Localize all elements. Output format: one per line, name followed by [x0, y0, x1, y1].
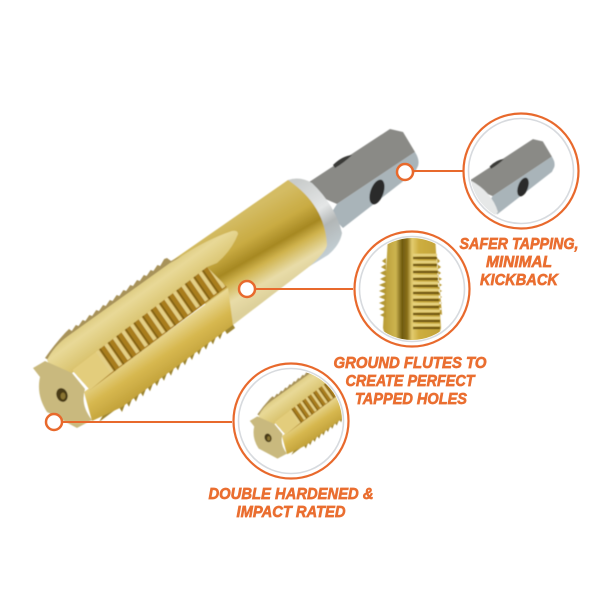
shank close-up [464, 139, 555, 218]
caption: IMPACT RATED [236, 504, 346, 521]
callout: double hardened [44, 362, 373, 518]
caption: KICKBACK [480, 272, 560, 289]
caption: GROUND FLUTES TO [334, 355, 486, 372]
connector line [247, 288, 353, 290]
connector line [54, 421, 232, 423]
inner ring [360, 236, 464, 342]
gold tap body [170, 180, 327, 325]
inner ring [468, 118, 574, 224]
connector line [405, 170, 463, 172]
ring [354, 232, 470, 346]
caption [208, 486, 374, 521]
hex shank [300, 129, 419, 228]
caption: TAPPED HOLES [355, 391, 468, 408]
caption [460, 236, 578, 289]
silver collar [288, 179, 342, 266]
caption: DOUBLE HARDENED & [208, 486, 374, 503]
product: tap tool [33, 129, 419, 428]
inner ring [238, 368, 344, 474]
marker dot [46, 414, 62, 430]
flute close-up [379, 236, 442, 342]
caption [334, 355, 486, 408]
threaded tip [33, 231, 238, 428]
caption: MINIMAL [486, 254, 552, 271]
ring [234, 364, 348, 478]
caption: SAFER TAPPING, [460, 236, 578, 253]
caption: CREATE PERFECT [346, 373, 476, 390]
ring [464, 114, 578, 228]
callout: safer tapping [397, 114, 578, 289]
tip close-up [250, 372, 342, 460]
marker dot [397, 164, 413, 180]
callout: ground flutes [239, 232, 486, 408]
marker dot [239, 281, 255, 297]
